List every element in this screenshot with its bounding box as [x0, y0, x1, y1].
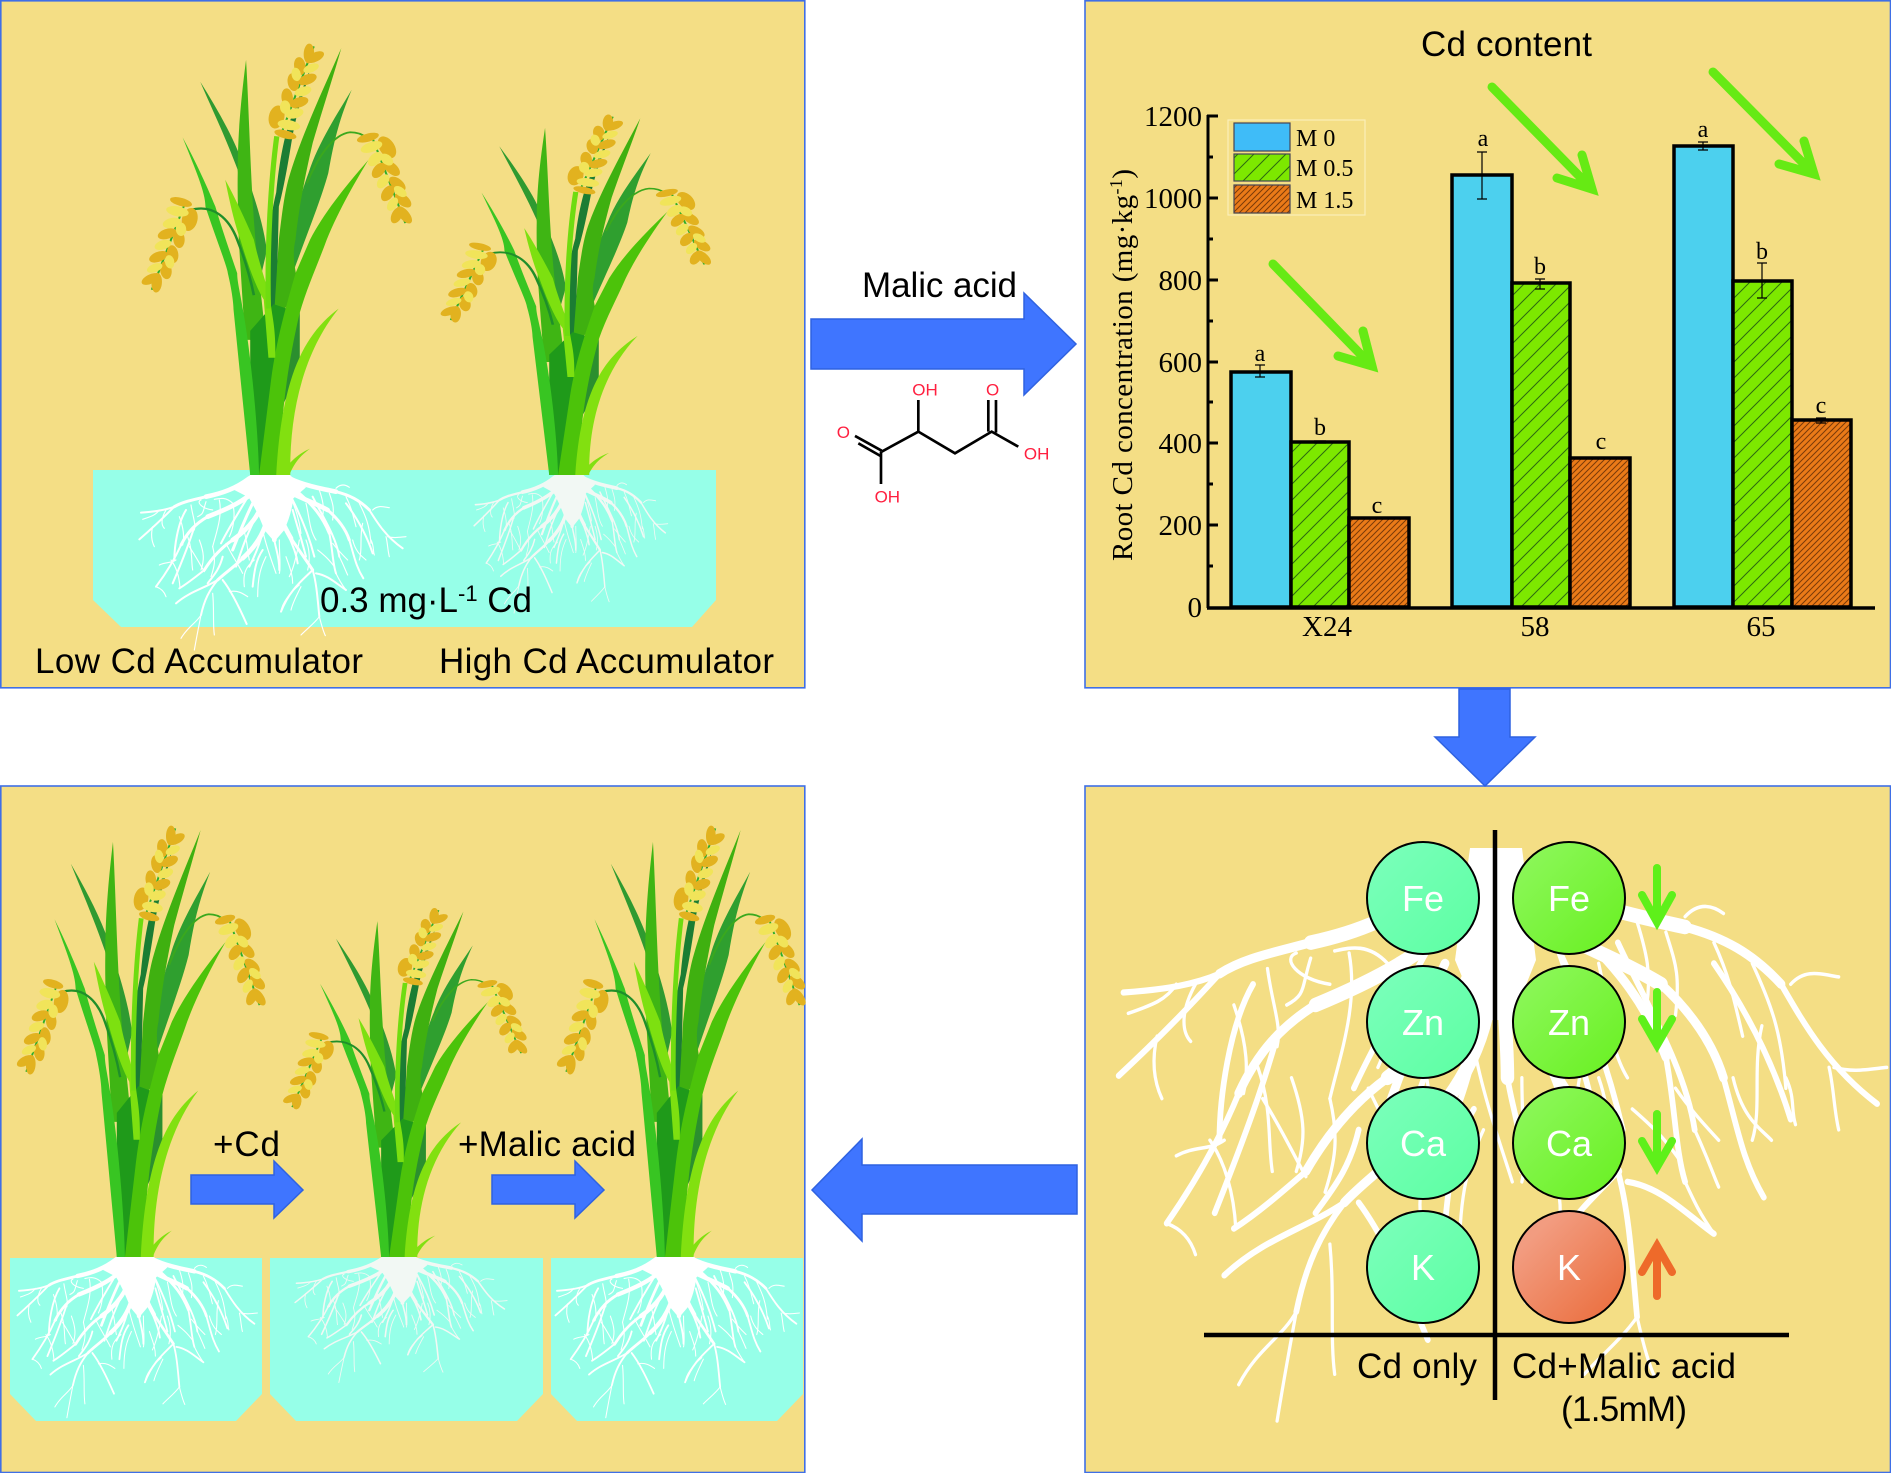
x labels: 58 [1520, 611, 1550, 643]
label: Cd only: Cd only [1357, 1347, 1478, 1386]
y tick labels: 1000 [1144, 183, 1202, 215]
legend [1228, 120, 1365, 215]
basin: plus Cd [270, 1258, 543, 1421]
plant: plus Cd [277, 904, 539, 1257]
molecule: malic acid structure: O [986, 381, 999, 400]
arrow: Zn decrease [1642, 992, 1672, 1045]
roots: control [17, 1256, 257, 1418]
molecule: malic acid structure: OH [912, 381, 938, 400]
roots: plus Cd [295, 1256, 507, 1383]
panel: treatment sequence [1, 786, 818, 1472]
bars: X24 [1231, 341, 1409, 607]
label: Cd concentration: -1 [458, 581, 478, 606]
x axis [1207, 606, 1875, 610]
bars: 65: b [1756, 239, 1768, 265]
y tick labels: 0 [1188, 592, 1202, 624]
ions: Cd only: Fe [1402, 878, 1444, 919]
y axis title: -1 [1106, 179, 1126, 194]
y tick labels: 200 [1158, 510, 1202, 542]
ions: Cd plus malic acid: K [1557, 1247, 1581, 1288]
y axis title: ) [1107, 169, 1139, 179]
label: Cd concentration: Cd [478, 581, 532, 620]
x labels [1302, 611, 1776, 643]
y tick labels: 600 [1158, 347, 1202, 379]
ions: Cd only [1367, 842, 1479, 1323]
bars: 58: a [1478, 126, 1489, 152]
y axis title: Root Cd concentration (mg·kg [1107, 195, 1139, 561]
x labels: 65 [1746, 611, 1776, 643]
arrow: K increase [1642, 1246, 1672, 1296]
y axis with ticks [1207, 115, 1218, 608]
arrow: Fe decrease [1642, 868, 1672, 922]
legend: M 0.5 [1296, 156, 1353, 182]
molecule: malic acid structure: OH [875, 487, 900, 506]
y tick labels: 400 [1158, 428, 1202, 460]
bar chart: root Cd concentration [1106, 101, 1875, 643]
label: Cd concentration: 0.3 mg·L [320, 581, 458, 620]
bars: 65: c [1816, 393, 1826, 419]
label: 1.5mM: (1.5mM) [1561, 1390, 1687, 1429]
plant: high Cd accumulator [434, 110, 724, 475]
arrow: Ca decrease [1642, 1114, 1672, 1167]
arrow: plus Cd [191, 1161, 303, 1218]
legend: M 1.5 [1296, 188, 1353, 214]
arrow: decrease 58 [1492, 87, 1592, 189]
label: Cd plus malic acid: Cd+Malic acid [1512, 1347, 1736, 1386]
panel: ion content [1085, 786, 1890, 1472]
ions: Cd plus malic acid [1513, 842, 1625, 1323]
basin: control [10, 1258, 262, 1421]
bars: 58: c [1596, 429, 1606, 455]
molecule: malic acid structure [837, 381, 1049, 506]
panel: low vs high Cd accumulator rice [1, 1, 805, 688]
basin: plus malic acid [551, 1258, 803, 1421]
molecule: malic acid structure: OH [1024, 444, 1049, 463]
ions: Cd only: Zn [1402, 1002, 1444, 1043]
molecule: malic acid structure: O [837, 423, 850, 442]
label: malic acid: Malic acid [862, 266, 1017, 305]
plant: low Cd accumulator [135, 39, 425, 475]
roots: low Cd accumulator [139, 475, 406, 650]
plant: control [11, 821, 278, 1257]
label: high Cd accumulator: High Cd Accumulator [439, 642, 774, 681]
chart title: Cd content [1421, 25, 1592, 64]
legend: M 0 [1296, 126, 1335, 152]
bars: X24: a [1255, 341, 1266, 367]
arrow: plus malic acid [492, 1161, 604, 1218]
ions: Cd plus malic acid: Zn [1548, 1002, 1590, 1043]
arrow: decrease 65 [1713, 72, 1814, 174]
bars: 65: a [1698, 117, 1709, 143]
ions: Cd only: K [1411, 1247, 1435, 1288]
label: low Cd accumulator: Low Cd Accumulator [35, 642, 363, 681]
nutrient solution basin [93, 470, 716, 627]
arrow: top right to bottom right [1435, 689, 1535, 786]
bars: X24: b [1314, 415, 1326, 441]
y tick labels: 1200 [1144, 101, 1202, 133]
ions: Cd plus malic acid: Ca [1546, 1123, 1593, 1164]
plant: plus malic acid [551, 821, 818, 1257]
roots: high Cd accumulator [474, 475, 668, 613]
arrow: decrease X24 [1273, 264, 1372, 366]
y tick labels: 800 [1158, 265, 1202, 297]
ions: Cd plus malic acid: Fe [1548, 878, 1590, 919]
arrow: malic acid treatment [811, 266, 1076, 395]
ions: Cd only: Ca [1400, 1123, 1447, 1164]
bars: 58 [1452, 126, 1630, 607]
x labels: X24 [1302, 611, 1352, 643]
divider axes [1204, 830, 1789, 1400]
label: plus Cd: +Cd [213, 1125, 280, 1164]
y tick labels [1144, 101, 1202, 624]
label: plus malic acid: +Malic acid [458, 1125, 636, 1164]
panel: Cd content chart [1085, 1, 1890, 688]
arrow: bottom right to bottom left [812, 1139, 1077, 1241]
bars: 65 [1674, 117, 1851, 607]
enlarged root background [1119, 848, 1887, 1421]
bars: 58: b [1534, 254, 1546, 280]
roots: plus malic acid [555, 1256, 799, 1418]
bars: X24: c [1372, 493, 1382, 519]
